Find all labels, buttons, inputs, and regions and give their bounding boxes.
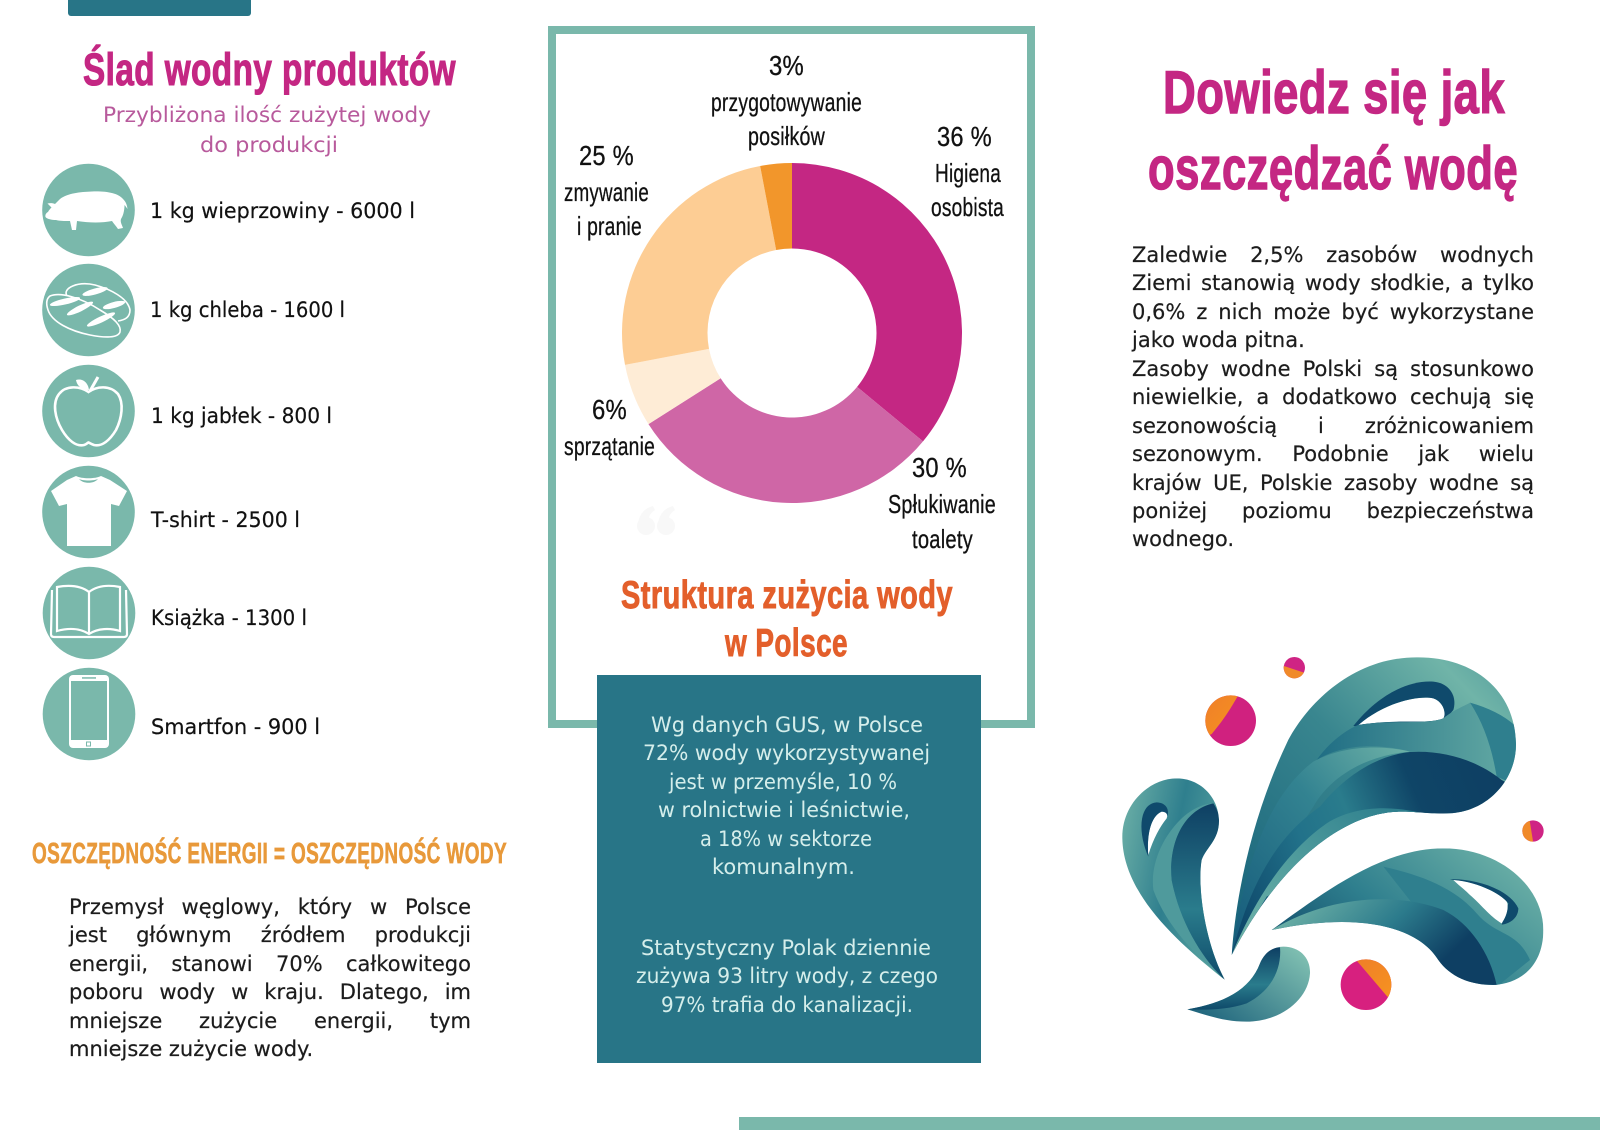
text block: energy saving paragraph: mniejsze zużycie wody. [69,1037,313,1061]
label: 30% Spłukiwanie toalety: 30 % [912,452,967,483]
icon: t-shirt [51,476,127,546]
ball: large lower [1340,959,1392,1010]
label: 36% Higiena osobista: Higiena [935,158,1001,188]
text block: water resources paragraph: sezonowym. Podobnie jak wielu [1132,442,1534,466]
text block: water use by sector [643,713,930,879]
label: 30% Spłukiwanie toalety [888,452,996,554]
text block: energy saving paragraph: jest głównym źródłem produkcji [69,923,471,947]
label: 6% sprzątanie [564,394,655,461]
label: 25% zmywanie i pranie [564,140,649,241]
text block: water resources paragraph: wodnego. [1132,527,1234,551]
slice: sprzątanie 6% [625,349,721,424]
product item: pork: 1 kg wieprzowiny - 6000 l [150,199,415,223]
text block: water resources paragraph [1132,243,1534,551]
icon: smartphone [69,675,109,748]
donut chart [622,163,962,503]
label: 36% Higiena osobista: osobista [931,192,1004,222]
text block: water use by sector: a 18% w sektorze [700,827,872,851]
icon: bread [47,284,130,337]
faint quotation mark [637,506,675,535]
product item: bread: 1 kg chleba - 1600 l [150,298,345,322]
label: 6% sprzątanie: 6% [592,394,627,425]
main title: Dowiedz się jak oszczędzać wodę [1148,59,1518,202]
subtitle: Przybliżona ilość zużytej wody [103,103,431,128]
product item: book: Książka - 1300 l [151,606,307,630]
heading: Struktura zużycia wody w Polsce: w Polsce [724,622,848,665]
label: 36% Higiena osobista [931,121,1004,222]
text block: water use by sector: jest w przemyśle, 10 % [668,770,897,794]
ball: small top [1284,657,1305,678]
text block: water resources paragraph: Ziemi stanowią wody słodkie, a tylko [1132,271,1534,295]
label: 36% Higiena osobista: 36 % [937,121,992,152]
text block: water use by sector: 72% wody wykorzystywanej [643,741,930,765]
text block: water resources paragraph: niewielkie, a dodatkowo cechują się [1132,385,1534,409]
label: 6% sprzątanie: sprzątanie [564,431,655,461]
product item: t-shirt [42,466,300,558]
panel: GUS statistics [597,675,981,1063]
text block: water resources paragraph: sezonowością i zróżnicowaniem [1132,414,1534,438]
text block: water resources paragraph: jako woda pitna. [1132,328,1305,352]
label: 3% przygotowywanie posiłków: 3% [769,50,804,81]
text block: energy saving paragraph: poboru wody w kraju. Dlatego, im [69,980,471,1004]
text block: water resources paragraph: poniżej poziomu bezpieczeństwa [1132,499,1534,523]
slice: Higiena osobista 36% [792,163,962,441]
text block: daily use per person: zużywa 93 litry wody, z czego [636,964,938,988]
icon: apple [55,377,122,445]
product item: pork [42,164,415,256]
subtitle: do produkcji [200,133,338,158]
illustration: water splash [1120,653,1547,1022]
text block: energy saving paragraph: mniejsze zużycie energii, tym [69,1009,471,1033]
label: 30% Spłukiwanie toalety: toalety [912,524,973,554]
big splash drop [1227,653,1520,960]
top accent bar [68,0,251,16]
heading: energy saving: OSZCZĘDNOŚĆ ENERGII = OSZCZĘDNOŚĆ WODY [32,836,507,870]
ball: small right [1522,820,1544,842]
label: 25% zmywanie i pranie: zmywanie [564,177,649,207]
bottom accent bar [739,1117,1600,1130]
product item: apples [42,365,332,457]
label: 25% zmywanie i pranie: i pranie [577,211,642,241]
product item: smartphone: Smartfon - 900 l [151,715,320,739]
product item: apples: 1 kg jabłek - 800 l [151,404,332,428]
label: 3% przygotowywanie posiłków: posiłków [748,121,825,151]
text block: water use by sector: komunalnym. [712,855,855,879]
label: 3% przygotowywanie posiłków [711,50,862,151]
text block: water use by sector: Wg danych GUS, w Polsce [651,713,923,737]
product item: t-shirt: T-shirt - 2500 l [150,508,300,532]
text block: water resources paragraph: krajów UE, Polskie zasoby wodne są [1132,470,1534,494]
icon: pig [45,191,128,230]
icon: open book [51,586,127,637]
label: 3% przygotowywanie posiłków: przygotowywanie [711,87,862,117]
small bottom splash drop [1187,947,1310,1022]
text block: daily use per person: 97% trafia do kanalizacji. [661,993,913,1017]
panel frame: water use structure [552,30,1031,724]
ball: large upper [1205,695,1256,746]
subtitle [103,103,431,158]
product item: smartphone [43,668,320,760]
product item: bread [42,264,345,356]
left splash drop [1120,777,1225,983]
slice: posiłki 3% [760,163,792,250]
heading: Struktura zużycia wody w Polsce [621,574,953,665]
text block: water use by sector: w rolnictwie i leśnictwie, [658,798,910,822]
title: Ślad wodny produktów: Ślad wodny produktów [83,44,456,95]
text block: daily use per person: Statystyczny Polak dziennie [641,936,931,960]
text block: water resources paragraph: Zasoby wodne Polski są stosunkowo [1132,357,1534,381]
text block: energy saving paragraph: Przemysł węglowy, który w Polsce [69,895,471,919]
text block: water resources paragraph: Zaledwie 2,5% zasobów wodnych [1132,243,1534,267]
text block: energy saving paragraph [68,895,471,1061]
label: 25% zmywanie i pranie: 25 % [579,140,634,171]
heading: Struktura zużycia wody w Polsce: Struktura zużycia wody [621,574,953,617]
slice: zmywanie i pranie 25% [622,166,776,365]
product item: book [43,567,307,659]
slice: Spłukiwanie toalety 30% [648,378,923,503]
text block: daily use per person [636,936,938,1017]
text block: energy saving paragraph: energii, stanowi 70% całkowitego [69,952,471,976]
right splash drop [1270,847,1547,987]
text block: water resources paragraph: 0,6% z nich może być wykorzystane [1132,300,1534,324]
label: 30% Spłukiwanie toalety: Spłukiwanie [888,489,996,519]
